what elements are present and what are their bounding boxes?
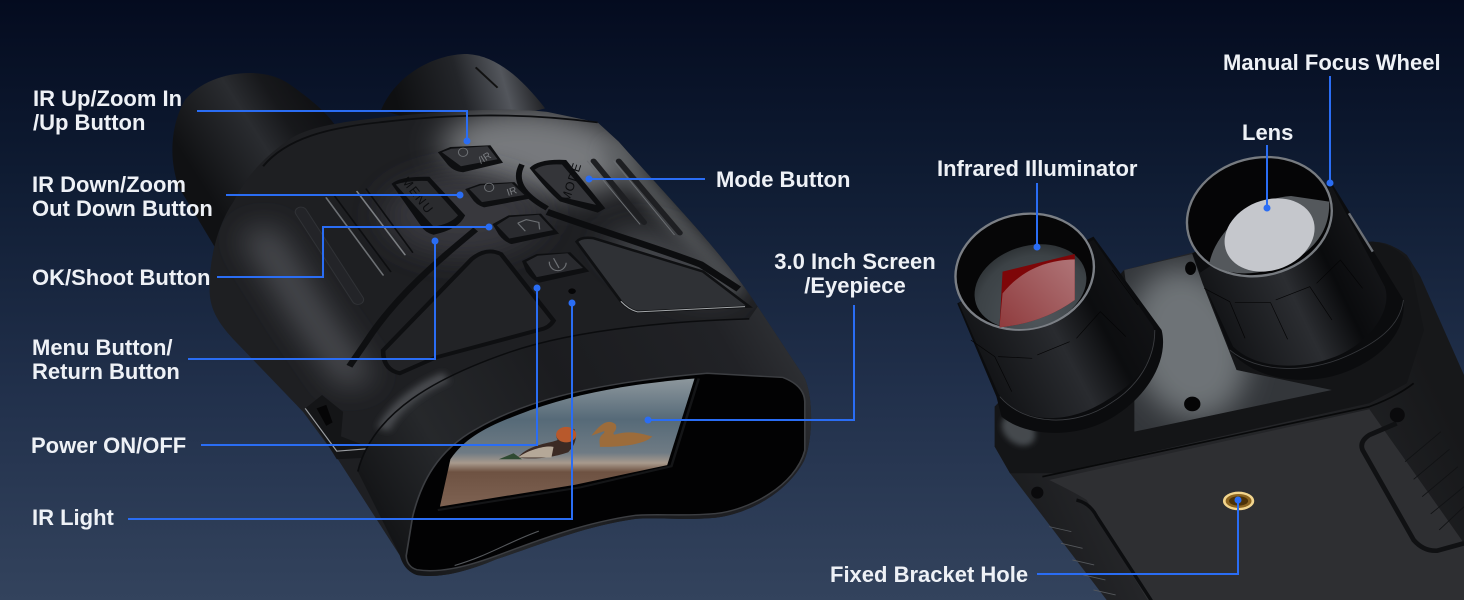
leader: IR down [226,192,464,198]
icon: power [549,258,566,271]
bottom seam [1042,383,1414,477]
grip ticks [1405,432,1464,530]
label: IR Up/Zoom In: IR Up/Zoom In [33,86,182,111]
label: IR Up/Zoom In: /Up Button [33,110,145,135]
button label: mode: MODE [559,162,584,204]
label: IR Down: IR Down/Zoom [32,172,186,197]
right body [995,242,1464,600]
callout lines [128,76,1334,574]
button: IR up [438,145,503,172]
screen [440,379,695,507]
IR light hole [568,288,576,294]
label: Menu: Return Button [32,359,180,384]
label: focus wheel: Manual Focus Wheel [1223,50,1441,75]
label: infrared: Infrared Illuminator [937,156,1138,181]
label: lens: Lens [1242,120,1293,145]
binocular body [210,110,811,576]
leader: bracket hole [1037,496,1242,574]
label: Power: Power ON/OFF [31,433,186,458]
lower left panel [383,251,554,373]
screw holes [1184,397,1200,411]
strap lug [305,395,373,459]
leader: power [201,284,540,445]
leader: menu [188,238,438,359]
shoulder highlight [995,408,1042,452]
eyepiece hood [358,307,811,576]
label: screen: 3.0 Inch Screen [774,249,936,274]
leader: lens [1264,145,1270,212]
leader: IR up [197,111,470,144]
button label: menu: MENU [399,174,436,216]
top plate [995,242,1424,473]
label: OK/Shoot: OK/Shoot Button [32,265,210,290]
eyepiece interior [406,373,805,571]
button label: IR up: /IR [477,150,493,167]
leader: screen [644,305,854,424]
icon: minus [485,183,494,192]
leader: mode [586,176,705,182]
red IR window [999,254,1075,327]
label: IR Down: Out Down Button [32,196,213,221]
label: screen: /Eyepiece [804,273,906,298]
right grip panel [1362,423,1464,551]
duck right [591,422,652,447]
leader: focus wheel [1326,76,1334,186]
left objective barrel [943,199,1163,433]
rear tube left [172,73,337,247]
label: Menu: Menu Button/ [32,335,173,360]
tripod socket [1223,492,1254,510]
X channels [547,212,739,289]
rear tube right [381,54,545,131]
plate highlight [1124,254,1332,432]
label: IR Light: IR Light [32,505,115,530]
right binoculars: front view [943,141,1464,600]
bottom plate [1049,409,1464,600]
label: Mode: Mode Button [716,167,850,192]
long grooves [301,161,680,300]
left grip ticks [1049,527,1116,595]
top edge rim [263,115,598,166]
leader: OK shoot [217,224,492,277]
lower right panel [577,238,749,312]
button: IR down [465,182,530,207]
button label: IR down: IR [506,185,518,199]
leader: IR light [128,300,576,519]
leader: infrared [1034,183,1040,250]
right objective barrel [1173,141,1404,380]
button: power [522,252,589,283]
button: mode [530,160,605,213]
icon: plus [458,148,468,156]
duck left [518,428,576,458]
body soft highlights [257,99,750,384]
icon: camera [518,220,540,231]
hood lower inner highlight [455,531,539,565]
label: bracket hole: Fixed Bracket Hole [830,562,1028,587]
button: OK shoot [493,214,559,244]
left binoculars: top view [172,54,811,576]
button: menu [391,177,465,235]
